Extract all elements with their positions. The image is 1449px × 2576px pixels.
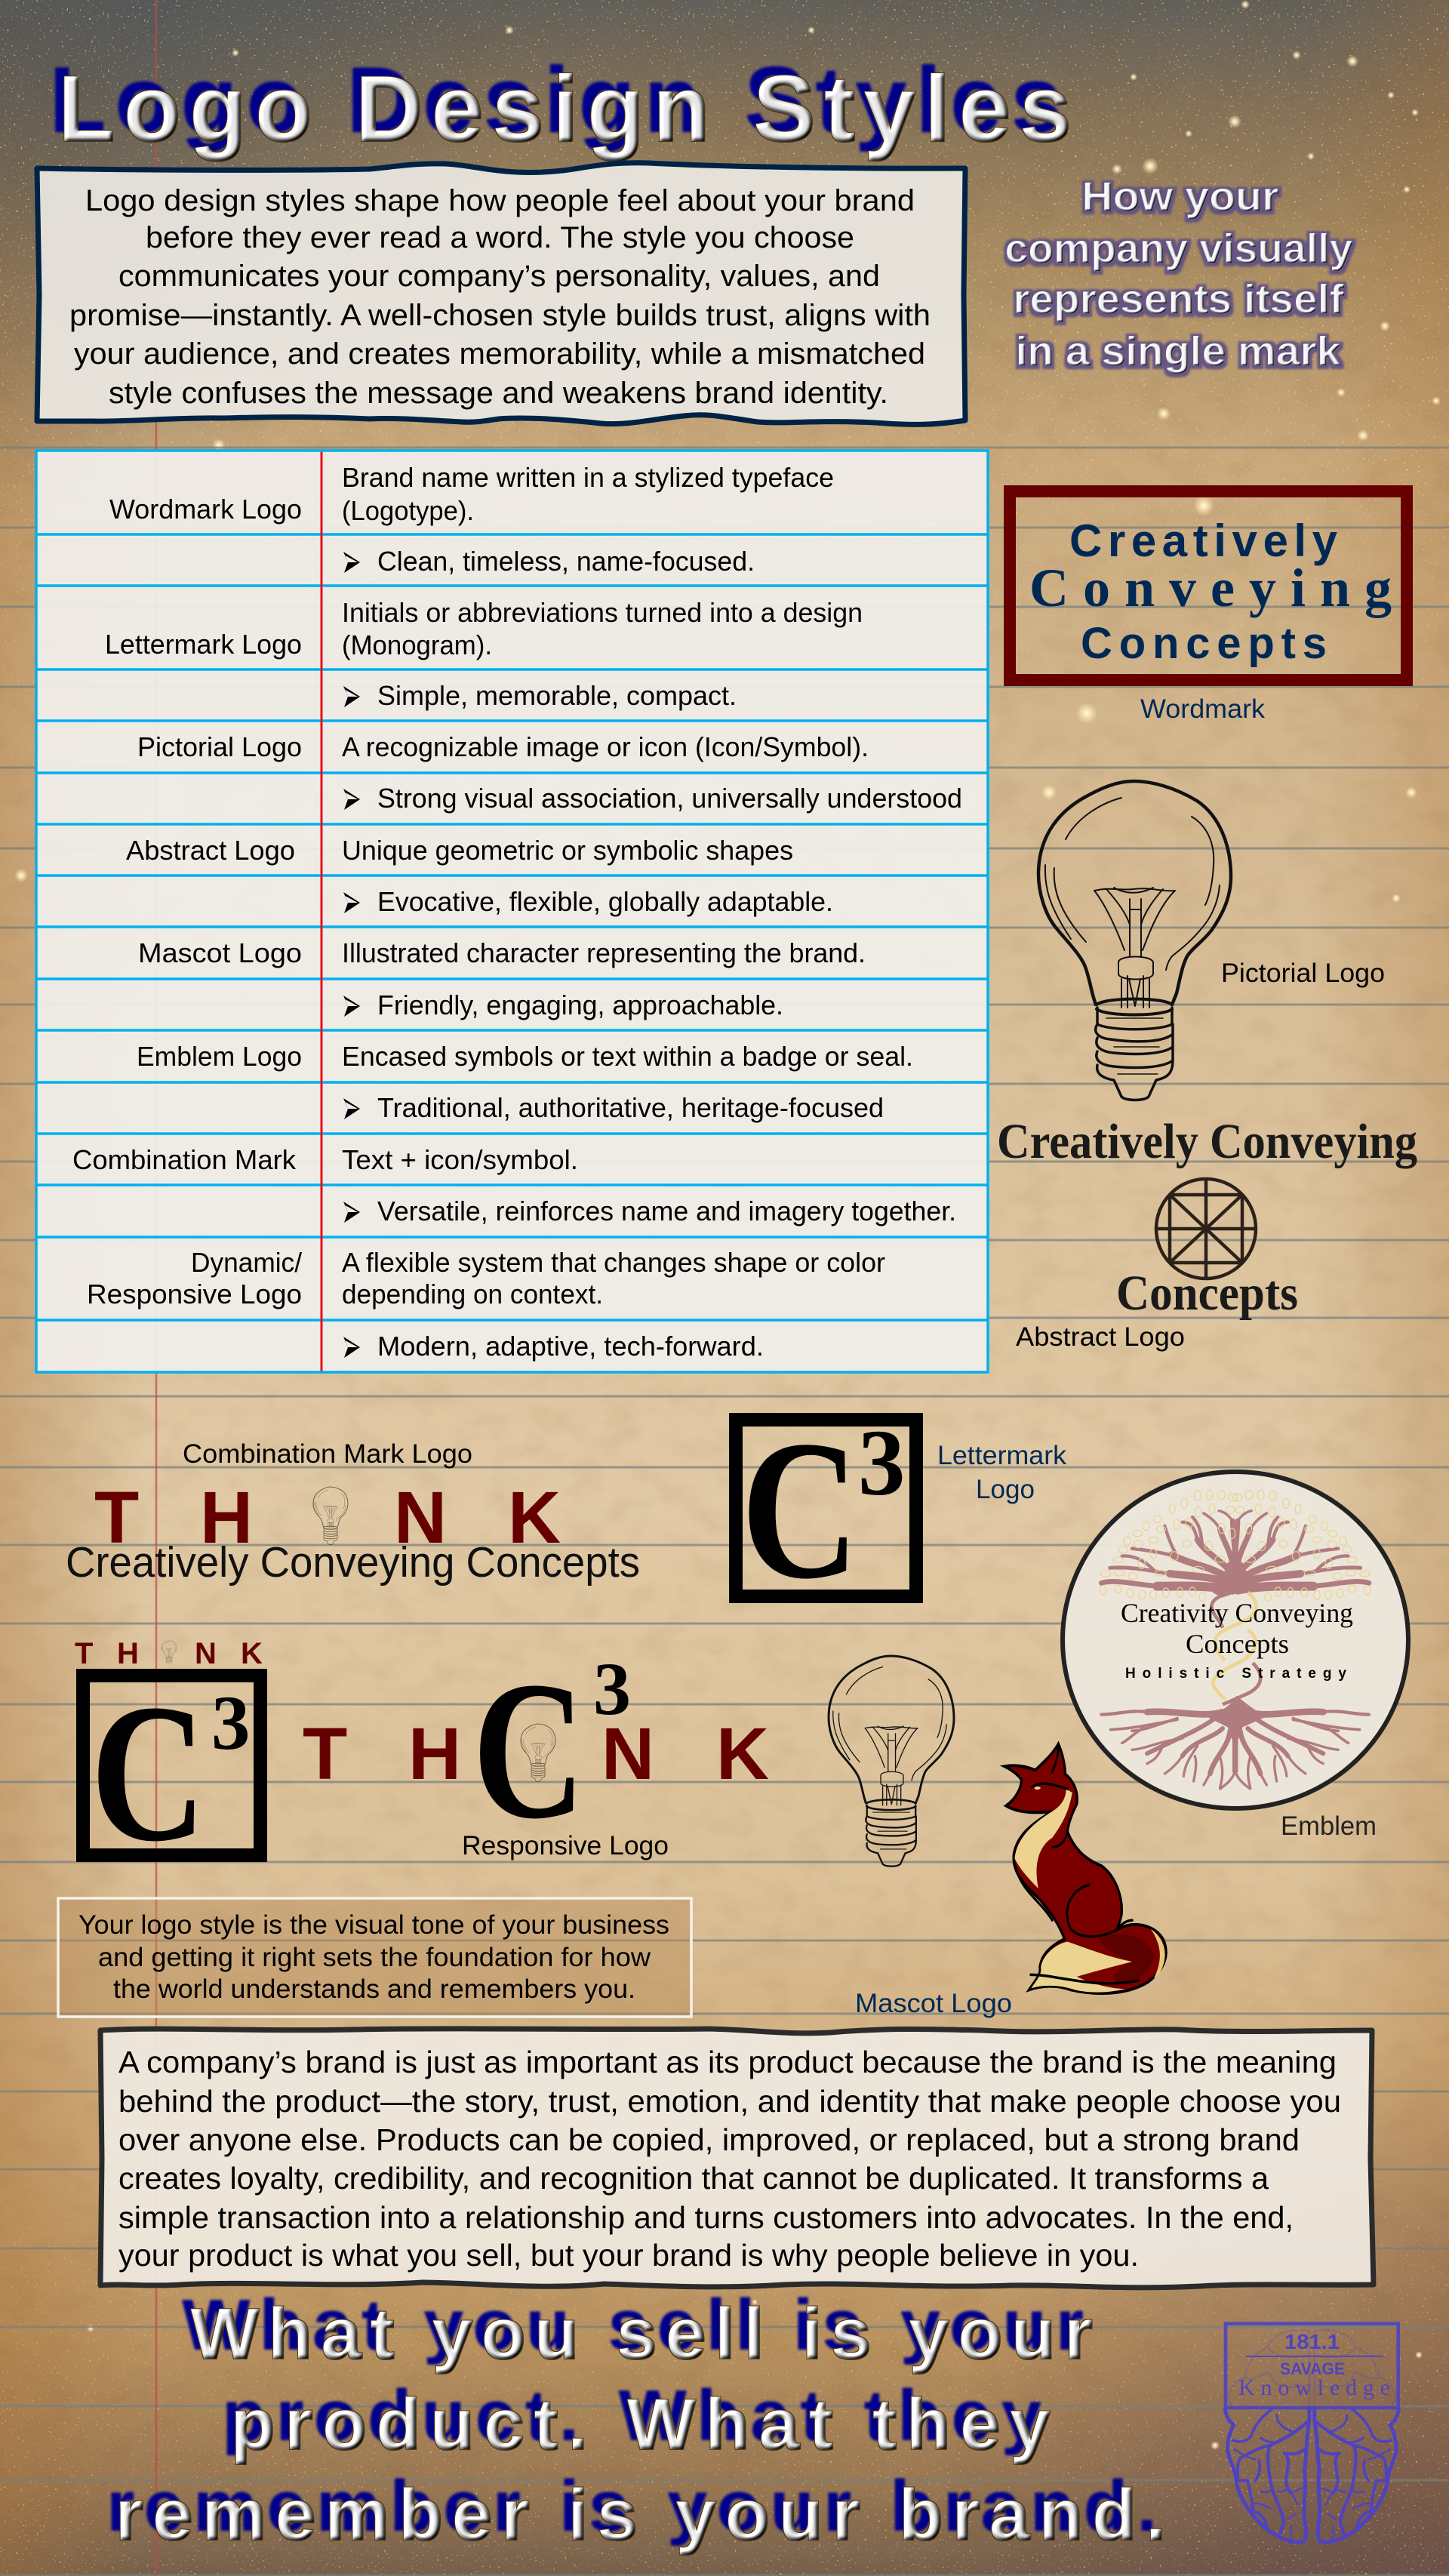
row: dynamic: Responsive Logo xyxy=(87,1279,302,1310)
row: wordmark: Brand name written in a stylized typeface xyxy=(342,462,834,493)
callout: logo style summary: and getting it right sets the foundation for how xyxy=(98,1943,651,1972)
tagline: company visually xyxy=(1005,226,1353,272)
emblem logo example xyxy=(1063,1472,1408,1808)
tagline xyxy=(1005,174,1353,374)
combination mark logo: N xyxy=(394,1476,447,1559)
intro text: before they ever read a word. The style you choose xyxy=(146,221,854,254)
intro text: promise—instantly. A well-chosen style builds trust, aligns with xyxy=(69,299,931,332)
row: wordmark: (Logotype). xyxy=(342,495,474,526)
panel: brand paragraph: creates loyalty, credibility, and recognition that cannot be duplicated. It transforms a xyxy=(118,2161,1269,2196)
emblem logo example: Holistic Strategy xyxy=(1125,1666,1346,1682)
panel: brand paragraph: behind the product—the story, trust, emotion, and identity that make people choose you xyxy=(118,2084,1341,2119)
closing headline: product. What they xyxy=(231,2384,1051,2465)
row: pictorial: A recognizable image or icon (Icon/Symbol). xyxy=(342,731,869,762)
wordmark logo example: Creatively xyxy=(1069,516,1338,566)
panel: brand paragraph xyxy=(100,2029,1374,2288)
callout: logo style summary: the world understands and remembers you. xyxy=(113,1974,635,2004)
combination mark logo: T xyxy=(94,1476,139,1559)
wordmark logo example xyxy=(1010,491,1407,680)
callout: logo style summary: Your logo style is the visual tone of your business xyxy=(78,1910,669,1940)
responsive logo: boxed monogram: 3 xyxy=(211,1680,251,1766)
row: emblem: Emblem Logo xyxy=(137,1041,302,1072)
row: pictorial trait: Strong visual association, universally understood xyxy=(377,783,962,814)
row: dynamic trait: Modern, adaptive, tech-forward. xyxy=(377,1331,764,1362)
row: combination xyxy=(72,1144,578,1175)
wordmark logo example: Concepts xyxy=(1081,619,1327,668)
responsive logo: boxed monogram: C xyxy=(91,1663,206,1882)
icon: responsive light bulb xyxy=(829,1656,954,1867)
combination mark logo xyxy=(66,1476,640,1587)
callout: logo style summary xyxy=(58,1898,691,2017)
row: abstract xyxy=(126,835,793,866)
responsive logo: small think: N xyxy=(195,1637,217,1670)
row: lettermark: (Monogram). xyxy=(342,629,492,660)
intro text: your audience, and creates memorability, while a mismatched xyxy=(74,337,925,371)
responsive logo: small think: H xyxy=(117,1637,139,1670)
row: combination trait: Versatile, reinforces name and imagery together. xyxy=(377,1196,956,1226)
intro text: style confuses the message and weakens brand identity. xyxy=(109,377,888,410)
abstract logo example xyxy=(997,1114,1417,1321)
combination mark logo: Creatively Conveying Concepts xyxy=(66,1538,640,1587)
responsive logo: small think xyxy=(75,1637,263,1670)
panel: logo types table xyxy=(36,451,988,1372)
combination mark logo: K xyxy=(508,1476,561,1559)
panel: brand paragraph: A company’s brand is just as important as its product because the brand is the meaning xyxy=(118,2045,1337,2079)
lettermark caption xyxy=(937,1441,1067,1504)
panel: intro paragraph xyxy=(37,163,965,424)
row: dynamic xyxy=(87,1247,885,1310)
row: lettermark: Lettermark Logo xyxy=(105,629,302,660)
lettermark caption: Logo xyxy=(976,1475,1035,1504)
responsive logo: small think: T xyxy=(75,1637,93,1670)
tagline: represents itself xyxy=(1014,277,1345,322)
row: wordmark: Wordmark Logo xyxy=(109,494,302,525)
brain logo badge xyxy=(1225,2324,1398,2543)
intro text: communicates your company’s personality, values, and xyxy=(118,260,880,293)
row: wordmark xyxy=(109,462,834,526)
lettermark logo example: 3 xyxy=(858,1411,906,1516)
intro text xyxy=(69,184,931,410)
intro wavy panel xyxy=(37,163,965,424)
closing headline: What you sell is your xyxy=(191,2294,1093,2374)
abstract logo example: Concepts xyxy=(1116,1266,1298,1321)
row: dynamic: A flexible system that changes shape or color xyxy=(342,1247,885,1278)
responsive logo: think with monogram: H xyxy=(408,1713,461,1795)
responsive logo: think with monogram xyxy=(303,1642,769,1860)
tagline: in a single mark xyxy=(1016,329,1342,374)
row: abstract trait: Evocative, flexible, globally adaptable. xyxy=(377,886,833,917)
combination mark caption: Combination Mark Logo xyxy=(183,1439,472,1469)
closing headline: remember is your brand. xyxy=(115,2475,1166,2556)
responsive caption: Responsive Logo xyxy=(462,1831,669,1860)
responsive logo: think with monogram: 3 xyxy=(593,1647,631,1731)
row: mascot: Illustrated character representing the brand. xyxy=(342,937,866,968)
emblem caption: Emblem xyxy=(1281,1811,1377,1841)
lettermark caption: Lettermark xyxy=(937,1441,1067,1470)
panel: brand paragraph: your product is what you sell, but your brand is why people believe in you. xyxy=(118,2238,1139,2273)
row: wordmark trait: Clean, timeless, name-focused. xyxy=(377,546,755,577)
icon: pictorial light bulb xyxy=(1038,781,1231,1100)
emblem logo example: Concepts xyxy=(1186,1629,1289,1659)
tagline: How your xyxy=(1082,174,1279,220)
panel: brand paragraph: over anyone else. Products can be copied, improved, or replaced, but a strong brand xyxy=(118,2122,1300,2157)
row: dynamic: Dynamic/ xyxy=(191,1247,302,1278)
row: dynamic: depending on context. xyxy=(342,1279,603,1310)
combination mark logo: H xyxy=(200,1476,253,1559)
brain logo badge: 181.1 xyxy=(1284,2330,1340,2353)
row: abstract: Abstract Logo xyxy=(126,835,295,866)
brain logo badge: Knowledge xyxy=(1238,2375,1390,2400)
title: Logo Design Styles xyxy=(58,57,1072,162)
responsive logo: think with monogram: C xyxy=(472,1642,585,1860)
row: abstract: Unique geometric or symbolic shapes xyxy=(342,835,793,866)
row: combination: Combination Mark xyxy=(72,1144,297,1175)
responsive logo: think with monogram: T xyxy=(303,1713,347,1795)
closing headline xyxy=(115,2294,1166,2556)
mascot logo: fox xyxy=(1004,1743,1166,1993)
lettermark logo example xyxy=(736,1400,916,1620)
wordmark logo example: Conveying xyxy=(1029,558,1392,618)
abstract caption: Abstract Logo xyxy=(1016,1322,1185,1352)
row: lettermark: Initials or abbreviations turned into a design xyxy=(342,597,863,628)
panel: brand paragraph: simple transaction into a relationship and turns customers into advocates. In the end, xyxy=(118,2200,1294,2235)
responsive logo: think with monogram: N xyxy=(601,1713,654,1795)
mascot caption: Mascot Logo xyxy=(855,1989,1012,2018)
row: combination: Text + icon/symbol. xyxy=(342,1144,578,1175)
row: emblem: Encased symbols or text within a badge or seal. xyxy=(342,1041,913,1072)
responsive logo: small think: K xyxy=(241,1637,263,1670)
wordmark caption: Wordmark xyxy=(1140,694,1266,724)
row: mascot trait: Friendly, engaging, approachable. xyxy=(377,989,783,1020)
responsive logo: boxed monogram xyxy=(83,1663,260,1882)
pictorial caption: Pictorial Logo xyxy=(1221,959,1385,988)
row: lettermark trait: Simple, memorable, compact. xyxy=(377,680,737,711)
brain logo badge: SAVAGE xyxy=(1280,2359,1345,2378)
row: emblem trait: Traditional, authoritative, heritage-focused xyxy=(377,1092,884,1123)
abstract logo example: Creatively Conveying xyxy=(997,1114,1417,1169)
row: lettermark xyxy=(105,597,863,660)
emblem logo example: Creativity Conveying xyxy=(1121,1598,1353,1628)
intro text: Logo design styles shape how people feel about your brand xyxy=(85,184,915,217)
responsive logo: think with monogram: K xyxy=(716,1713,769,1795)
row: pictorial: Pictorial Logo xyxy=(137,731,302,762)
row: mascot: Mascot Logo xyxy=(138,937,302,968)
lettermark logo example: C xyxy=(741,1400,859,1620)
